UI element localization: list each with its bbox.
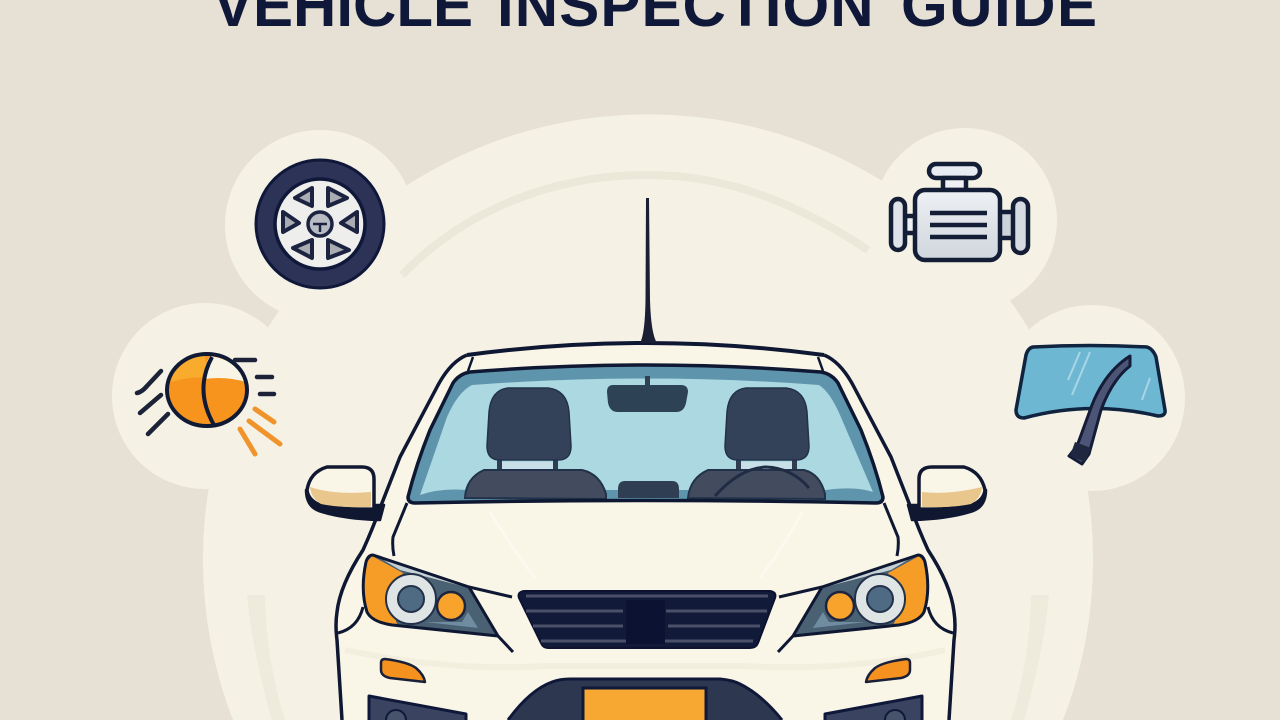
side mirror right xyxy=(908,467,986,520)
center console xyxy=(618,481,679,498)
front grille xyxy=(519,591,775,648)
car xyxy=(306,198,986,720)
icon: headlight bulb xyxy=(137,354,280,454)
turn signal right xyxy=(866,659,910,682)
lower intake xyxy=(508,679,782,720)
side mirror left xyxy=(306,467,384,520)
seat right xyxy=(688,388,825,499)
fog light right xyxy=(825,696,922,720)
license plate xyxy=(583,688,706,720)
rear-view mirror xyxy=(607,376,688,412)
headlight left xyxy=(363,555,513,652)
fog light left xyxy=(369,696,466,720)
icon: windshield and wiper xyxy=(1016,346,1165,464)
turn signal left xyxy=(381,659,425,682)
antenna xyxy=(640,198,657,343)
background bubble cluster xyxy=(112,114,1185,720)
icon: tire xyxy=(256,160,384,288)
icon: engine xyxy=(891,164,1028,260)
car body xyxy=(337,343,954,720)
hood creases xyxy=(490,512,802,578)
windshield xyxy=(408,357,883,503)
headlight right xyxy=(778,555,928,652)
seat left xyxy=(465,388,606,499)
